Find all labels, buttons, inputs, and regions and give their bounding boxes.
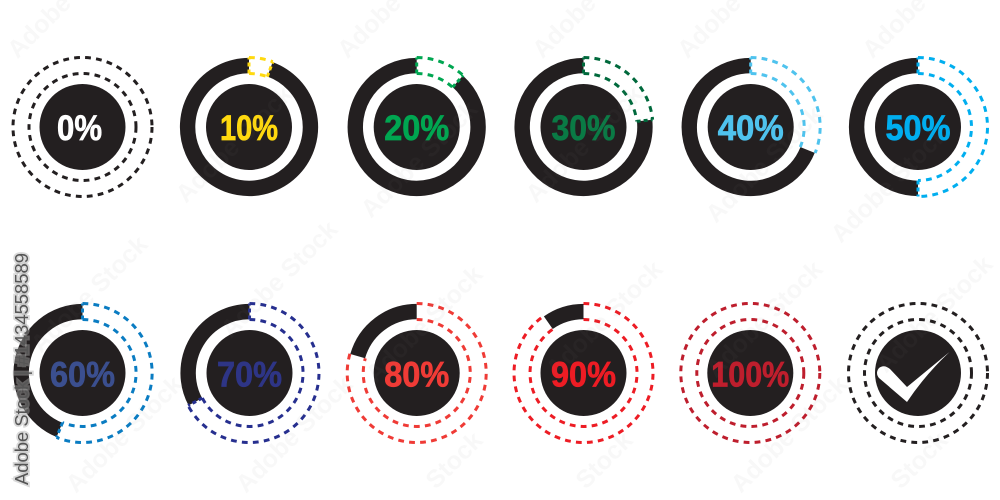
gauge: 100%: 100% — [711, 356, 789, 394]
watermarks: Stock — [420, 426, 488, 494]
gauge: 30% — [522, 58, 653, 188]
watermarks: Adobe Stock — [540, 255, 668, 383]
gauge: 80%: 80% — [384, 356, 449, 394]
gauge: 80% — [347, 304, 486, 442]
watermarks: Adobe Stock — [825, 120, 953, 248]
watermarks: Adobe Stock — [170, 80, 298, 208]
watermarks: Adobe Stock — [360, 260, 488, 388]
gauge: 30%: 30% — [552, 109, 616, 148]
watermarks: Adobe Stock — [870, 250, 998, 378]
watermarks: Adobe Stock — [230, 370, 358, 498]
gauge: 20% — [355, 58, 478, 188]
gauge: 60%: 60% — [50, 356, 115, 394]
watermarks: Stock — [885, 426, 953, 494]
gauge: 0% — [13, 58, 152, 196]
gauge: completed check mark — [848, 304, 988, 442]
watermarks: Adobe Stock — [700, 100, 828, 228]
gauge: 90%: 90% — [551, 356, 616, 394]
gauge: 0%: 0% — [57, 109, 102, 148]
gauge: 20%: 20% — [384, 109, 449, 148]
gauge: 70%: 70% — [217, 356, 282, 394]
gauge: 90% — [514, 304, 653, 442]
icon: check mark — [877, 352, 950, 402]
gauge: 60% — [21, 303, 152, 442]
watermarks: Adobe Stock — [215, 215, 343, 343]
watermarks: Adobe Stock — [25, 230, 153, 358]
watermarks: Adobe Stock — [60, 370, 188, 498]
gauge: 50%: 50% — [886, 109, 950, 148]
gauge: 10%: 10% — [220, 109, 278, 148]
gauge: 50% — [857, 58, 988, 196]
gauge: 40% — [689, 58, 820, 188]
watermarks: Adobe Stock — [700, 255, 828, 383]
gauge: 10% — [188, 58, 310, 188]
vertical stock id text: Adobe Stock | #1434558589 — [11, 253, 32, 485]
watermarks: Stock — [570, 426, 638, 494]
gauge: 100% — [681, 304, 820, 442]
gauge: 40%: 40% — [718, 109, 784, 148]
watermarks: Adobe Stock — [520, 80, 648, 208]
watermarks: Adobe Stock — [355, 95, 483, 223]
watermarks: Adobe Stock — [725, 370, 853, 498]
gauge: 70% — [188, 304, 319, 442]
